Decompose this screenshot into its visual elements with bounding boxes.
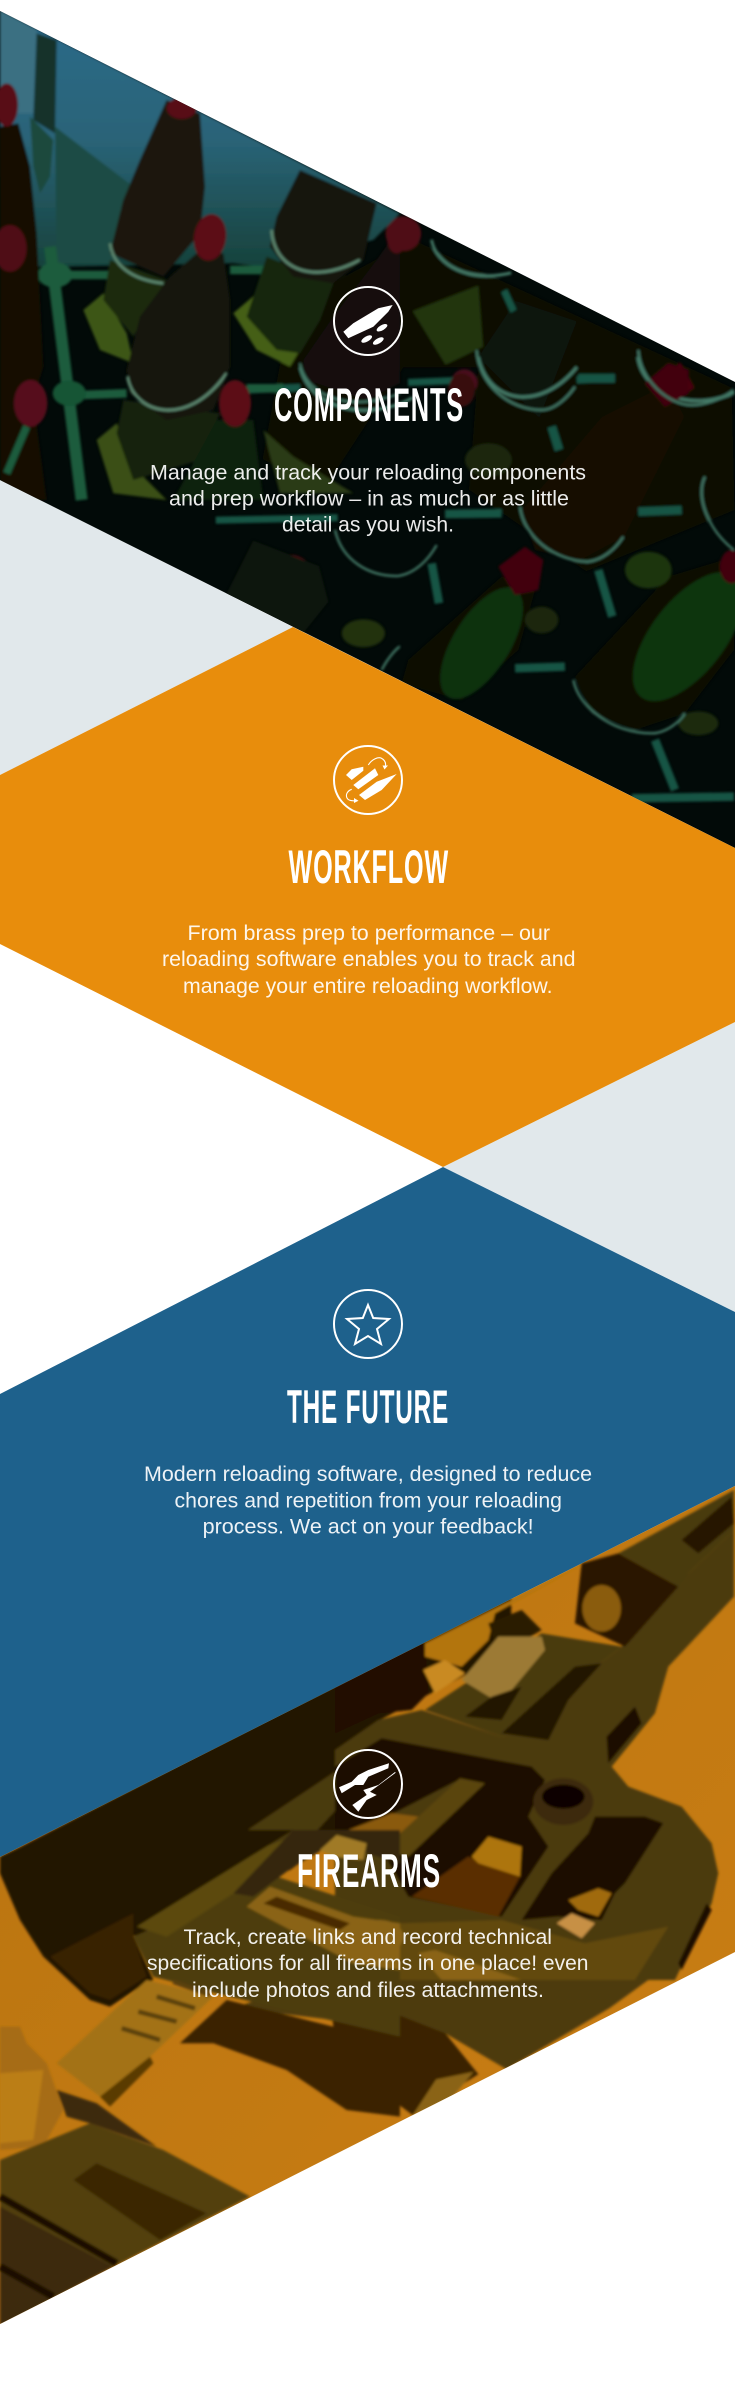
photo: paper shadow: [55, 127, 133, 263]
heading: firearms: FIREARMS: [297, 1844, 441, 1897]
photo: stock left: [0, 1830, 403, 2327]
photo: lower frame: [234, 1855, 680, 2069]
photo: big window: [335, 1738, 548, 1917]
photo: window bar: [382, 1778, 485, 1857]
photo: rail ridges: [122, 1982, 210, 2040]
text: future description: process. We act on your feedback!: [203, 1514, 534, 1538]
heading: the future: THE FUTURE: [287, 1380, 449, 1433]
text: components description: and prep workflow – in as much or as little: [169, 486, 569, 510]
icon: star: [334, 1290, 402, 1358]
photo: rail tabs: [462, 1637, 545, 1698]
photo: right half: [335, 350, 735, 798]
photo: olive rail base: [425, 1633, 622, 1737]
photo: bullet front centre: [97, 423, 167, 500]
icon: cartridge and bullets: [334, 287, 402, 355]
panel: the future: [0, 1167, 735, 1857]
grey triangle right: [443, 1022, 735, 1312]
photo: stock stripes: [0, 2197, 117, 2297]
photo: tan step: [423, 1660, 465, 1693]
text: components description: Manage and track your reloading components: [150, 460, 586, 484]
panel: firearms photo: [0, 1480, 735, 2330]
photo: bullet lower: [173, 420, 263, 500]
photo: green rack: [432, 378, 734, 798]
photo: window floor: [412, 1857, 520, 1917]
text: firearms description: [147, 1925, 588, 2002]
icon: two rifles: [334, 1750, 402, 1818]
the future section: [144, 1290, 592, 1538]
photo: pockets: [465, 1687, 522, 1720]
photo: right cutout: [522, 1817, 663, 1920]
text: workflow description: manage your entire reloading workflow.: [183, 974, 552, 998]
text: firearms description: specifications for all firearms in one place! even: [147, 1951, 588, 1975]
photo: olive glints: [625, 552, 672, 588]
photo: dark bracket: [0, 1830, 293, 2007]
text: components description: [150, 460, 586, 536]
photo: left half: [0, 10, 407, 500]
photo: overview layer: [0, 1595, 680, 2115]
photo: bullet back left: [83, 293, 133, 363]
photo: paper backdrop: [0, 10, 400, 267]
photo: olive strip behind icon: [248, 1770, 337, 1846]
panel: components photo: [0, 0, 735, 860]
photo: side slots: [607, 1707, 642, 1763]
photo: screw pocket: [575, 1553, 678, 1647]
photo: case rims: [335, 350, 734, 733]
text: components description: detail as you wish.: [282, 512, 454, 536]
photo: dark bullet bodies: [522, 383, 685, 560]
photo: rail: [57, 1980, 213, 2097]
grey triangle left: [0, 480, 293, 775]
text: workflow description: reloading software enables you to track and: [162, 947, 576, 971]
photo: stock: [0, 2123, 250, 2327]
photo: dark vertical strap: [33, 33, 57, 133]
photo: bullet columns left: [0, 123, 47, 500]
components section: [150, 287, 586, 536]
photo: lower lit plate: [335, 1913, 668, 1980]
photo: lower shadow: [180, 2000, 400, 2117]
text: future description: [144, 1462, 592, 1538]
firearms section: [147, 1750, 588, 2002]
photo: upper right bullets: [216, 216, 734, 643]
photo: olive edge: [137, 1837, 300, 1937]
photo: knob: [0, 2027, 63, 2150]
text: workflow description: [162, 921, 576, 998]
heading: components: COMPONENTS: [274, 378, 464, 431]
photo: bullet behind icon: [303, 227, 400, 400]
photo: paper highlight: [0, 10, 37, 113]
workflow section: [162, 746, 576, 998]
photo: red tips: [645, 363, 688, 407]
photo: slotted lit plate: [247, 1887, 400, 1970]
photo: upper right top: [618, 1490, 734, 1587]
photo: bracket fill behind icon: [284, 1758, 337, 1872]
heading: workflow: WORKFLOW: [288, 840, 449, 893]
photo: green case bodies: [438, 585, 525, 700]
text: workflow description: From brass prep to performance – our: [188, 921, 550, 945]
photo: stock right: [335, 1490, 734, 1980]
text: firearms description: Track, create links and record technical: [184, 1925, 552, 1949]
photo: upper dark parts: [335, 1643, 428, 1733]
text: future description: Modern reloading software, designed to reduce: [144, 1462, 592, 1486]
text: firearms description: include photos and files attachments.: [192, 1978, 544, 2002]
photo: lower shadow: [331, 2016, 480, 2116]
photo: rack bars: [50, 247, 283, 500]
photo: ring: [533, 1778, 593, 1825]
photo: main frame: [335, 1530, 734, 1980]
photo: bracket top: [0, 1595, 511, 1937]
icon: workflow bullets with arrows: [334, 746, 402, 814]
photo: main plate: [133, 1873, 400, 2037]
photo: bullet back right: [233, 293, 300, 367]
text: future description: chores and repetition from your reloading: [174, 1488, 562, 1512]
photo: bullet rim lower right: [300, 363, 400, 402]
panel: workflow: [0, 627, 735, 1167]
photo: dark block: [488, 1610, 542, 1643]
